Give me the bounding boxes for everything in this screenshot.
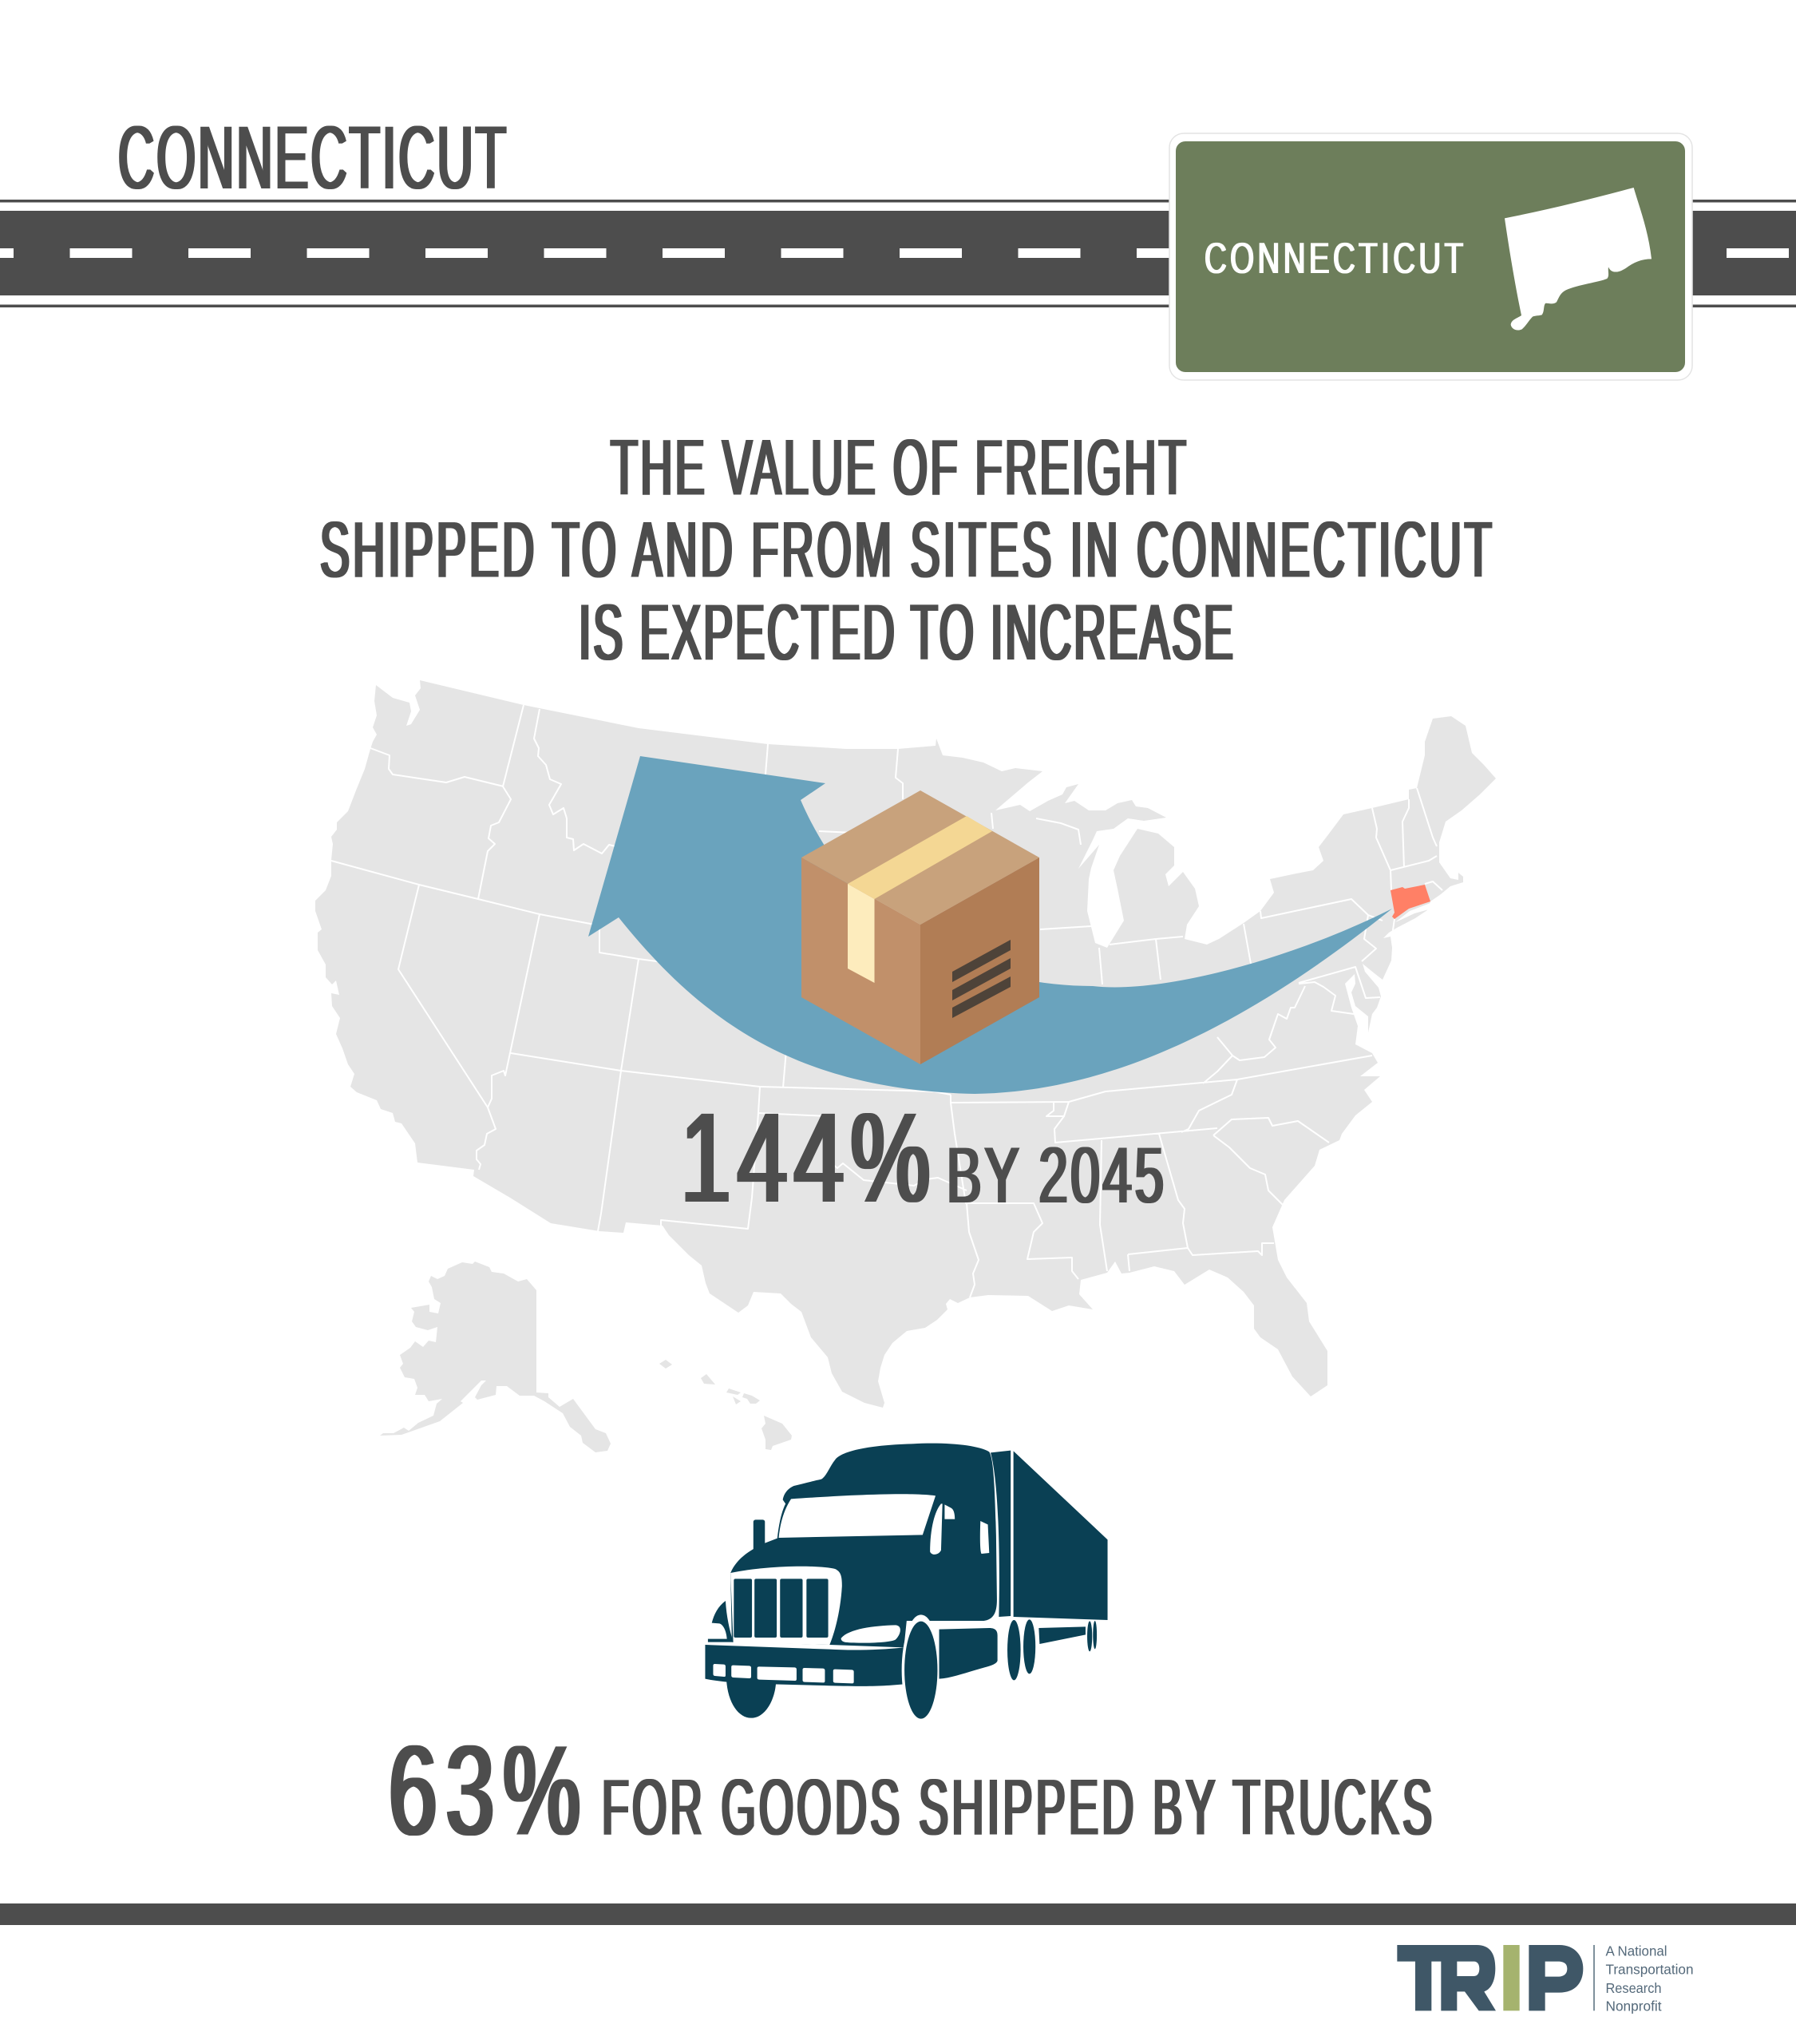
map: Alaska — [380, 1262, 611, 1452]
logo tagline: A National — [1606, 1943, 1667, 1959]
heading — [320, 424, 1492, 677]
map: Hawaii — [659, 1360, 792, 1450]
logo tagline: Nonprofit — [1606, 1998, 1662, 2014]
stat: 144% by 2045 — [681, 1087, 1164, 1230]
icon: truck — [705, 1444, 1108, 1725]
map: state borders — [331, 705, 1442, 1297]
arrow — [588, 756, 1392, 1094]
footer bar — [0, 1903, 1796, 1925]
heading: SHIPPED TO AND FROM SITES IN CONNECTICUT — [320, 506, 1492, 595]
icon: cardboard box — [801, 790, 1039, 1064]
stat: 144% by 2045: 144% — [681, 1087, 930, 1230]
road — [0, 200, 1796, 307]
stat: 63% for goods shipped by trucks — [389, 1718, 1432, 1861]
heading: THE VALUE OF FREIGHT — [611, 424, 1186, 513]
sign label: CONNECTICUT — [1205, 234, 1463, 283]
logo: TRIP — [1397, 1943, 1694, 2014]
icon: Connecticut state shape — [1505, 188, 1652, 331]
title: CONNECTICUT — [118, 109, 506, 208]
stat: 144% by 2045: BY 2045 — [947, 1131, 1164, 1219]
stat: 63% for goods shipped by trucks: 63% — [389, 1718, 580, 1861]
map: Connecticut highlighted — [1391, 885, 1430, 919]
heading: IS EXPECTED TO INCREASE — [579, 588, 1233, 677]
US map — [315, 680, 1496, 1452]
highway sign — [1169, 133, 1692, 380]
map: Long Island Sound gap — [1395, 903, 1430, 922]
stat: 63% for goods shipped by trucks: FOR GOODS SHIPPED BY TRUCKS — [602, 1764, 1432, 1852]
logo tagline — [1606, 1943, 1694, 2014]
map: contiguous states — [315, 680, 1496, 1408]
logo tagline: Research — [1606, 1980, 1662, 1996]
logo tagline: Transportation — [1606, 1961, 1694, 1977]
